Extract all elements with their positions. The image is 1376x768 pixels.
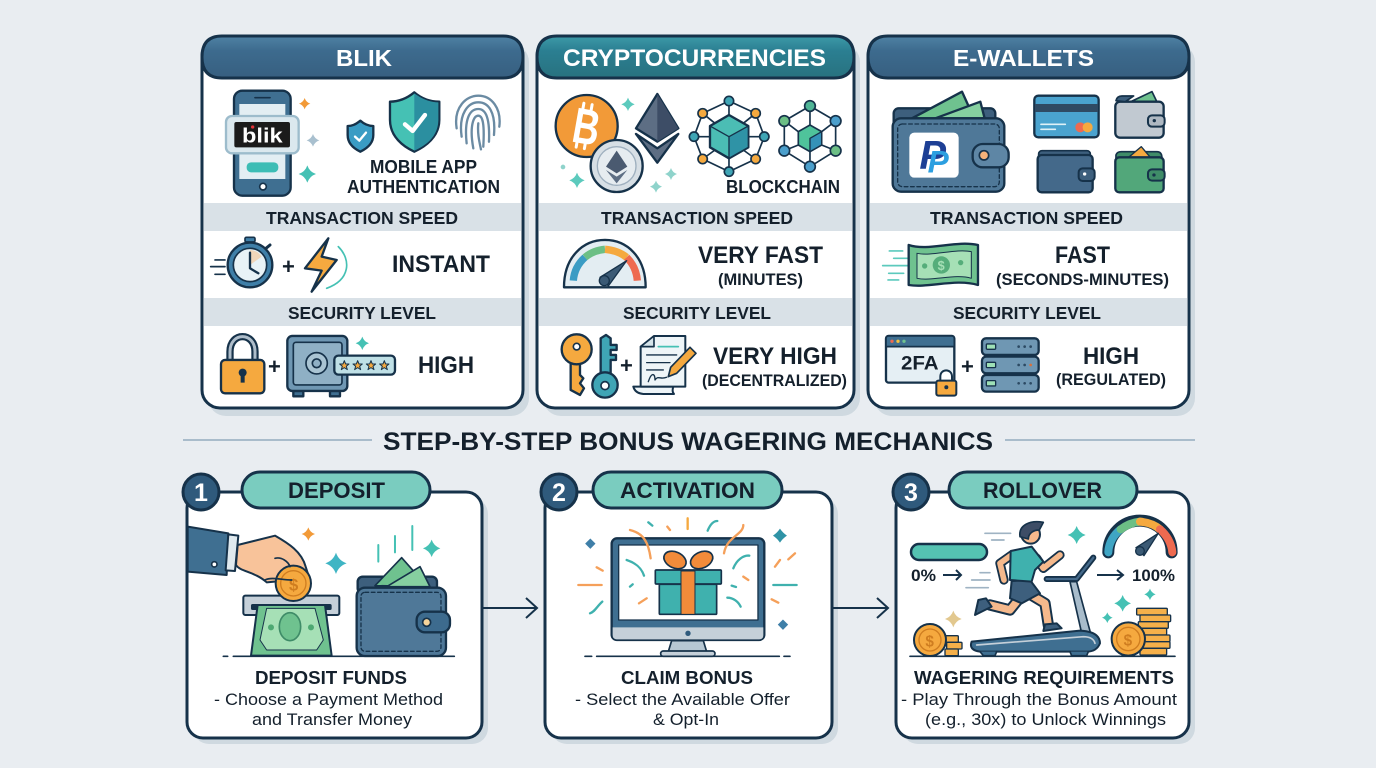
text: deposit funds: - Choose a Payment Method [214,690,443,709]
gauge with 100% label: 100% [1132,566,1175,585]
illustration: runner on treadmill with coins: $ [1124,633,1133,650]
icon: card and small wallets [1034,92,1165,192]
text: wagering requirements: - Play Through the Bonus Amount [901,690,1177,709]
text: deposit funds [214,667,443,729]
value: fast (seconds-minutes): (SECONDS-MINUTES) [996,270,1169,289]
icon: flying banknote [883,244,978,286]
text: mobile app authentication: AUTHENTICATION [347,177,500,197]
label: blockchain: BLOCKCHAIN [726,177,840,197]
text: deposit funds: DEPOSIT FUNDS [255,667,407,688]
illustration: monitor with gift and confetti [578,518,797,656]
label: transaction speed: TRANSACTION SPEED [266,208,458,228]
text: mobile app authentication [347,157,500,197]
value: high (regulated): (REGULATED) [1056,370,1166,389]
label: security level: SECURITY LEVEL [623,303,771,323]
value: very fast (minutes): (MINUTES) [718,270,803,289]
icon: blockchain networks [689,96,841,176]
icon: PayPal wallet [893,92,1009,192]
icon: phone with blik logo [226,91,319,196]
section title with rules: STEP-BY-STEP BONUS WAGERING MECHANICS [383,428,993,456]
pill: rollover: ROLLOVER [983,478,1102,503]
heading: cryptocurrencies: CRYPTOCURRENCIES [563,45,826,72]
heading: e-wallets [868,36,1189,78]
heading: cryptocurrencies [537,36,854,78]
text: wagering requirements [901,667,1177,729]
icon: PayPal wallet: P [928,144,950,180]
label: transaction speed: TRANSACTION SPEED [601,208,793,228]
illustration: runner on treadmill with coins: $ [925,634,934,651]
step number 1: 1 [194,479,208,507]
text: claim bonus: & Opt-In [653,710,719,729]
text: deposit funds: and Transfer Money [252,710,413,729]
illustration: hand inserting coin and banknote: $ [289,575,299,594]
label: security level: SECURITY LEVEL [288,303,436,323]
arrow: step 1 to step 2 [482,598,537,618]
panel: step 3 rollover [893,472,1195,744]
label: transaction speed: TRANSACTION SPEED [930,208,1123,228]
value: fast (seconds-minutes): FAST [1055,242,1110,269]
plus sign: + [961,354,974,379]
icon: bitcoin and ethereum coins: B [568,97,604,157]
panel: BLIK [202,36,529,416]
value: fast (seconds-minutes) [996,242,1169,289]
text: wagering requirements: WAGERING REQUIREMENTS [914,667,1174,688]
pill: deposit: DEPOSIT [288,478,386,503]
step number 1 [183,474,219,510]
plus sign: + [620,353,633,378]
step number 2: 2 [552,479,566,507]
value: very high (decentralized) [702,343,847,390]
pill: rollover [949,472,1137,508]
text: wagering requirements: (e.g., 30x) to Unlock Winnings [925,710,1166,729]
heading: e-wallets: E-WALLETS [953,45,1094,71]
text: claim bonus: CLAIM BONUS [621,667,753,688]
value: high (regulated) [1056,343,1166,389]
panel: step 1 deposit [183,472,488,744]
text: mobile app authentication: MOBILE APP [370,157,477,177]
text: claim bonus: - Select the Available Offer [575,690,790,709]
value: very fast (minutes): VERY FAST [698,242,823,269]
panel: e-wallets [868,36,1195,416]
icon: keys and signed contract [562,334,696,398]
value: very fast (minutes) [698,242,823,289]
icon: 2FA window with lock: 2FA [901,353,939,374]
heading: BLIK: BLIK [336,45,392,71]
gauge with 100% label [1097,521,1175,585]
icon: shields and fingerprint [348,92,500,152]
progress bar with 0% label [911,544,987,585]
plus sign: + [282,254,295,279]
icon: server stack [982,338,1039,392]
value: high: HIGH [418,352,474,379]
heading: BLIK [202,36,523,78]
step number 3 [893,474,929,510]
illustration: hand inserting coin and banknote [188,526,454,656]
icon: speed gauge [564,240,646,287]
value: instant: INSTANT [392,251,490,278]
icon: bitcoin and ethereum coins [556,94,678,193]
arrow: step 2 to step 3 [832,598,888,618]
text: claim bonus [575,667,790,729]
plus sign: + [268,354,281,379]
value: very high (decentralized): (DECENTRALIZED) [702,371,847,390]
illustration: runner on treadmill with coins [910,522,1175,656]
pill: deposit [242,472,430,508]
label: security level: SECURITY LEVEL [953,303,1101,323]
value: high (regulated): HIGH [1083,343,1139,370]
icon: padlock and safe [221,336,395,396]
icon: 2FA window with lock [886,336,956,396]
step number 3: 3 [904,479,918,507]
progress bar with 0% label: 0% [911,566,936,585]
panel: step 2 activation [541,472,838,744]
icon: flying banknote: $ [938,259,945,273]
icon: stopwatch and lightning [211,237,347,292]
step number 2 [541,474,577,510]
icon: phone with blik logo: blik [242,125,283,148]
panel: cryptocurrencies [537,36,860,416]
pill: activation [593,472,782,508]
value: very high (decentralized): VERY HIGH [713,343,837,370]
pill: activation: ACTIVATION [620,478,755,503]
icon: PayPal wallet: P [919,133,946,177]
